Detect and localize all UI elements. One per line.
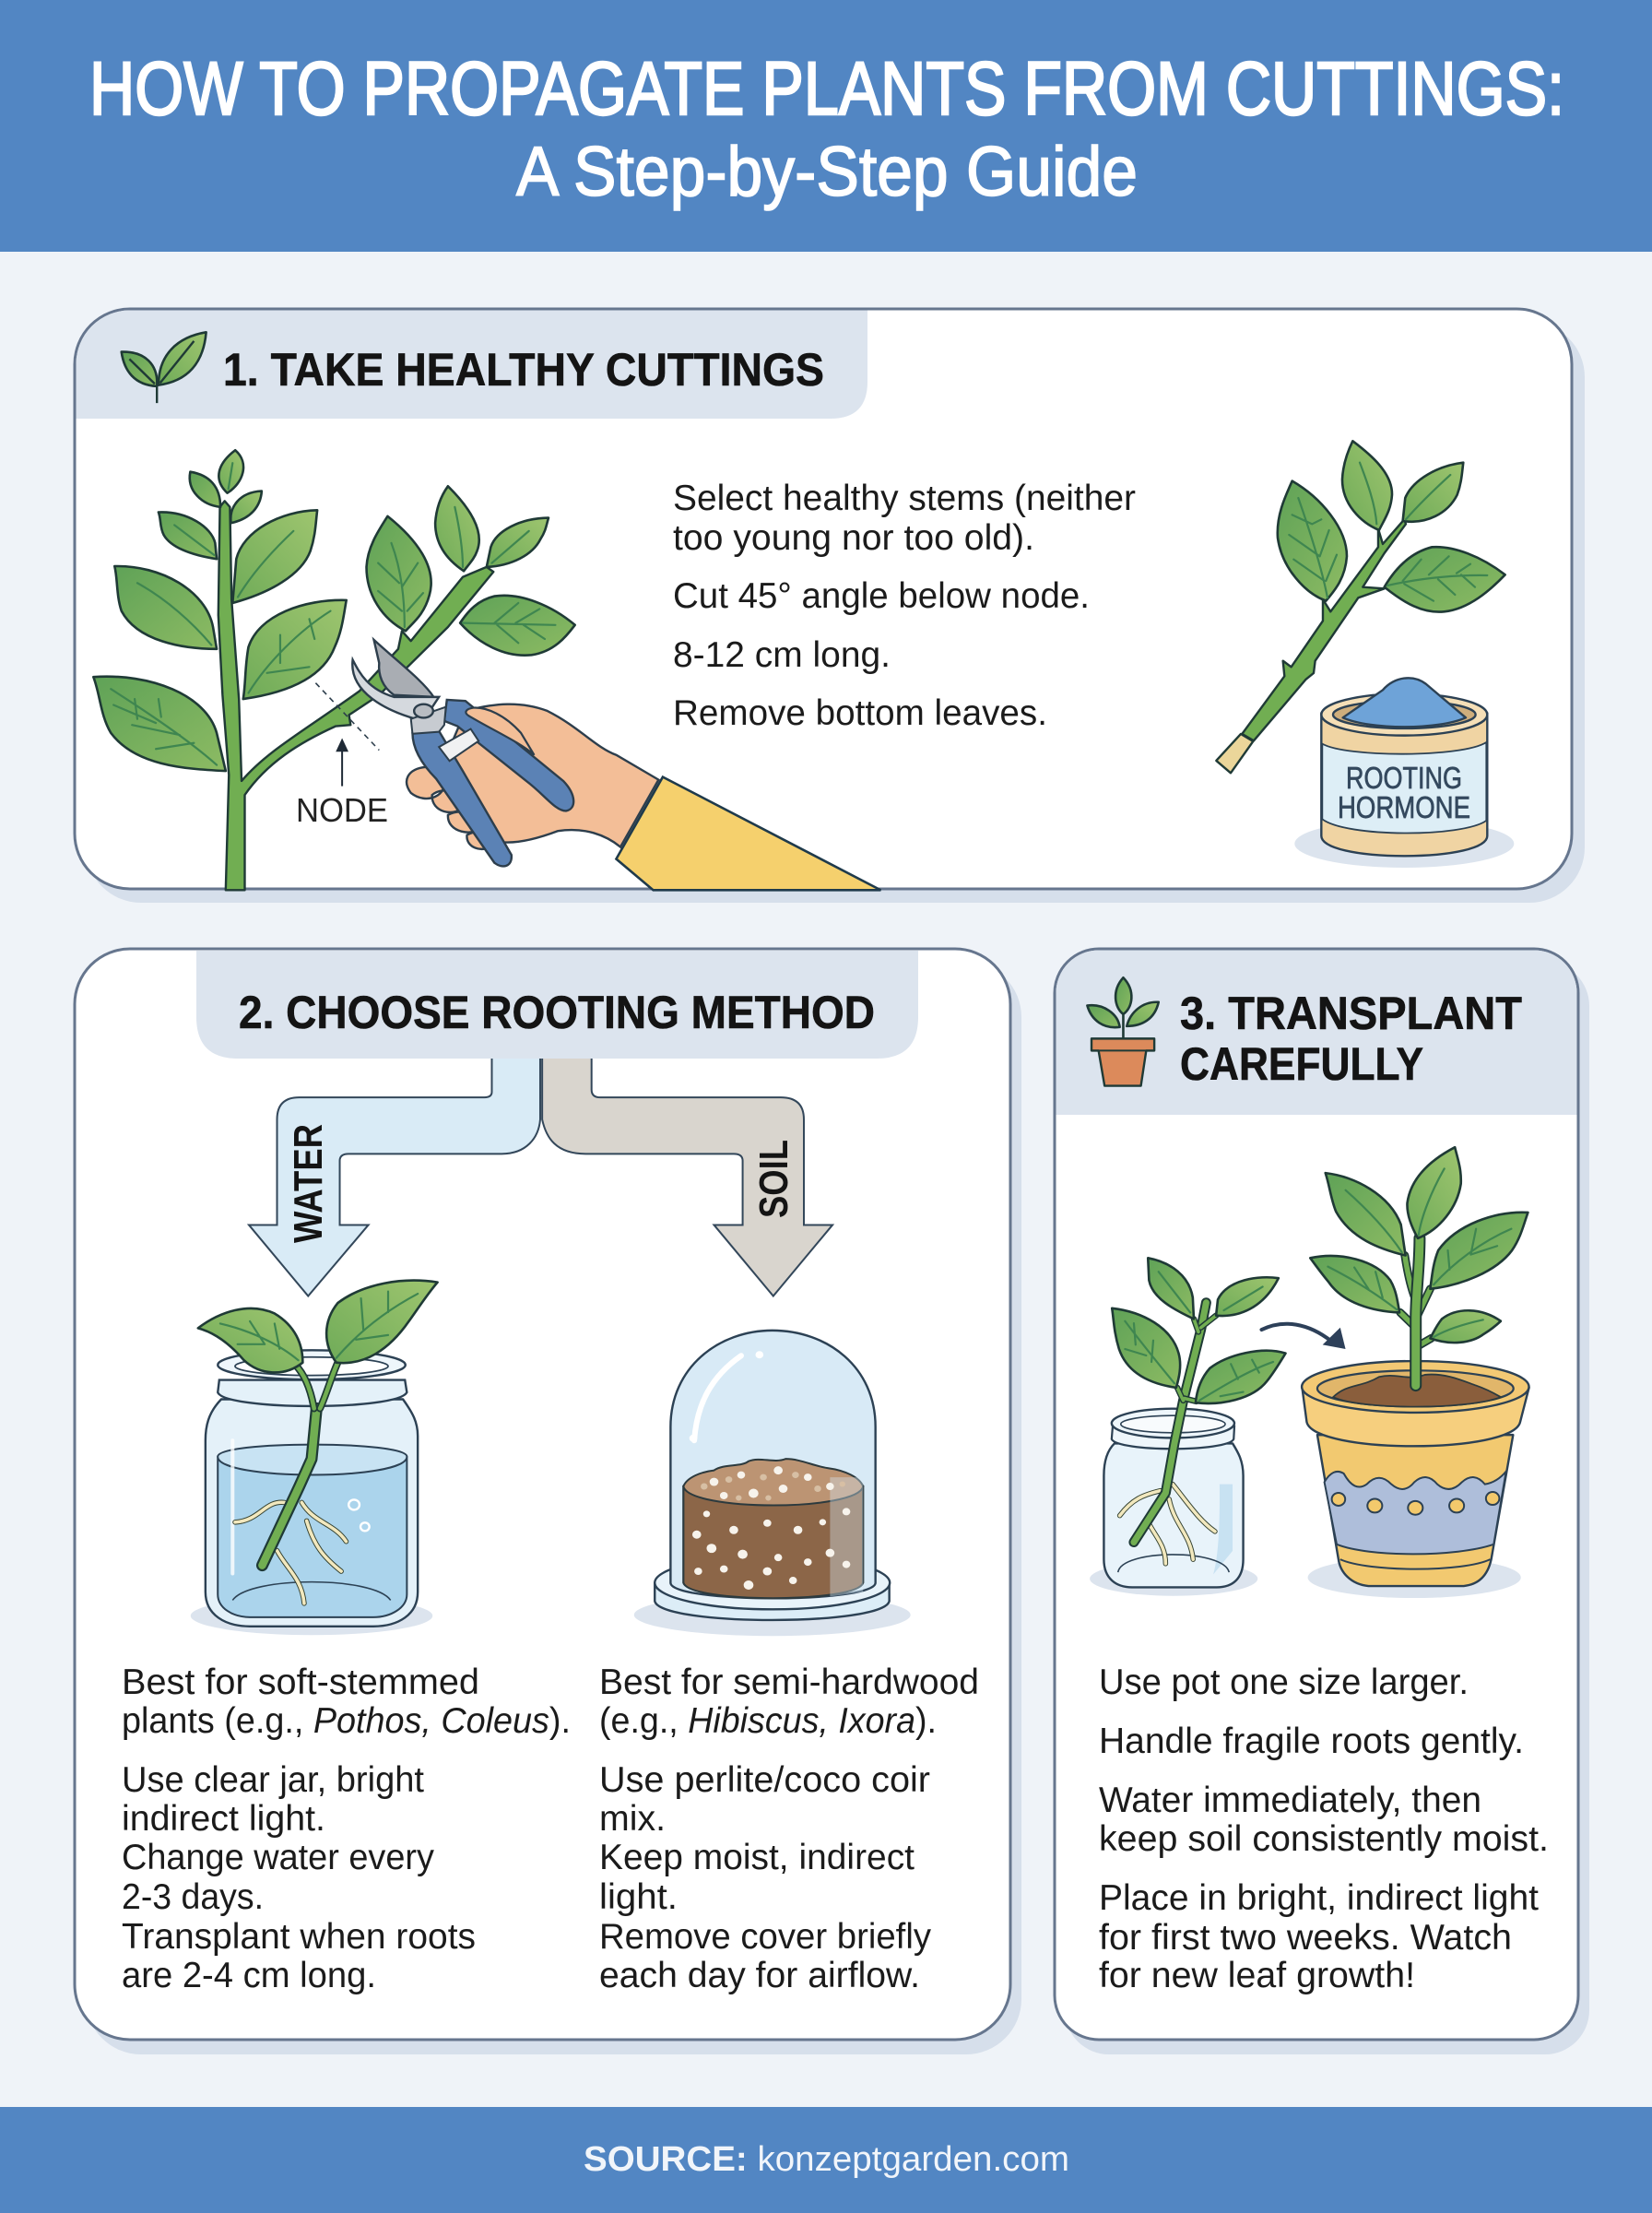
plant stem [1400, 1256, 1432, 1347]
text block: transplant instructions: for new leaf growth! [1099, 1956, 1415, 1995]
text block: soil method: light. [599, 1877, 678, 1917]
label: rooting hormone [1338, 761, 1470, 824]
label: water: WATER [286, 1124, 331, 1243]
text block: step 1 instructions: Select healthy stems (neither [673, 479, 1136, 518]
illustration: rooting hormone jar [1294, 678, 1514, 868]
fingers over handle [466, 708, 534, 755]
label: rooting hormone: ROOTING [1346, 761, 1462, 795]
icon: potted plant [1087, 977, 1159, 1086]
panel: step 1 take healthy cuttings [75, 309, 1585, 903]
heading: step 1: 1. TAKE HEALTHY CUTTINGS [223, 344, 824, 396]
label: rooting hormone: HORMONE [1338, 790, 1470, 824]
text block: step 1 instructions [673, 479, 1136, 733]
title banner: A Step-by-Step Guide [516, 133, 1138, 211]
text block: soil method: (e.g., Hibiscus, Ixora). [599, 1701, 937, 1741]
hand [442, 704, 658, 847]
footer: source: SOURCE: konzeptgarden.com [584, 2140, 1069, 2179]
illustration: soil under glass dome [634, 1331, 911, 1636]
text block: transplant instructions: Use pot one size larger. [1099, 1663, 1469, 1702]
text block: soil method: each day for airflow. [599, 1956, 920, 1995]
text block: transplant instructions: Place in bright, indirect light [1099, 1878, 1539, 1918]
text block: water method: 2-3 days. [122, 1877, 264, 1917]
illustration: cutting [1216, 441, 1505, 773]
heading: step 3: CAREFULLY [1180, 1038, 1423, 1090]
plant leaves [1326, 1173, 1406, 1256]
label: node: NODE [296, 791, 388, 829]
text block: water method: Best for soft-stemmed [122, 1663, 479, 1702]
illustration: potted plant [1302, 1147, 1529, 1598]
arrow: jar to pot [1261, 1324, 1346, 1349]
roots [1120, 1485, 1215, 1564]
heading: step 3: 3. TRANSPLANT [1180, 988, 1522, 1039]
text block: soil method: Best for semi-hardwood [599, 1663, 979, 1702]
plant leaves [93, 450, 575, 771]
text block: soil method: Use perlite/coco coir [599, 1760, 930, 1800]
heading: step 2 [196, 951, 918, 1059]
text block: soil method: Remove cover briefly [599, 1917, 931, 1957]
text block: transplant instructions: Water immediately, then [1099, 1781, 1481, 1820]
text block: transplant instructions [1099, 1663, 1549, 1995]
heading: step 1 [76, 310, 867, 419]
arrow: water [249, 1050, 540, 1296]
text block: step 1 instructions: too young nor too old). [673, 518, 1034, 558]
text block: soil method [599, 1663, 979, 1995]
title banner [0, 0, 1652, 252]
label: soil: SOIL [751, 1140, 796, 1218]
text block: step 1 instructions: Cut 45° angle below node. [673, 576, 1090, 616]
text block: water method: Transplant when roots [122, 1917, 476, 1957]
text block: water method [122, 1663, 571, 1995]
illustration: plant with pruners and hand [93, 450, 880, 890]
plant stem [218, 501, 493, 890]
text block: water method: Change water every [122, 1838, 434, 1877]
heading: step 3 [1056, 950, 1576, 1115]
text block: water method: plants (e.g., Pothos, Coleus). [122, 1701, 571, 1741]
icon: two leaves [122, 332, 206, 403]
panel: step 2 choose rooting method [75, 949, 1021, 2054]
text block: water method: indirect light. [122, 1799, 325, 1839]
panel: step 3 transplant carefully [1055, 949, 1589, 2054]
leaves [1148, 1258, 1194, 1319]
text block: soil method: Keep moist, indirect [599, 1838, 914, 1877]
footer: source [0, 2107, 1652, 2213]
stem [1134, 1303, 1206, 1543]
text block: water method: are 2-4 cm long. [122, 1956, 376, 1995]
node marker [315, 683, 379, 787]
text block: transplant instructions: Handle fragile roots gently. [1099, 1722, 1524, 1761]
roots [235, 1502, 346, 1604]
heading: step 2: 2. CHOOSE ROOTING METHOD [239, 987, 875, 1038]
text block: step 1 instructions: Remove bottom leaves. [673, 693, 1047, 733]
illustration: cutting in water jar [191, 1281, 438, 1635]
stem [262, 1408, 316, 1566]
arrow: soil [542, 1050, 832, 1296]
leaves [198, 1308, 302, 1372]
illustration: cutting in small jar [1090, 1258, 1285, 1596]
pruners [352, 640, 573, 866]
text block: transplant instructions: keep soil consistently moist. [1099, 1819, 1549, 1859]
text block: step 1 instructions: 8-12 cm long. [673, 635, 891, 675]
text block: soil method: mix. [599, 1799, 666, 1839]
sleeve [616, 777, 880, 890]
text block: water method: Use clear jar, bright [122, 1760, 424, 1800]
text block: transplant instructions: for first two weeks. Watch [1099, 1918, 1512, 1958]
